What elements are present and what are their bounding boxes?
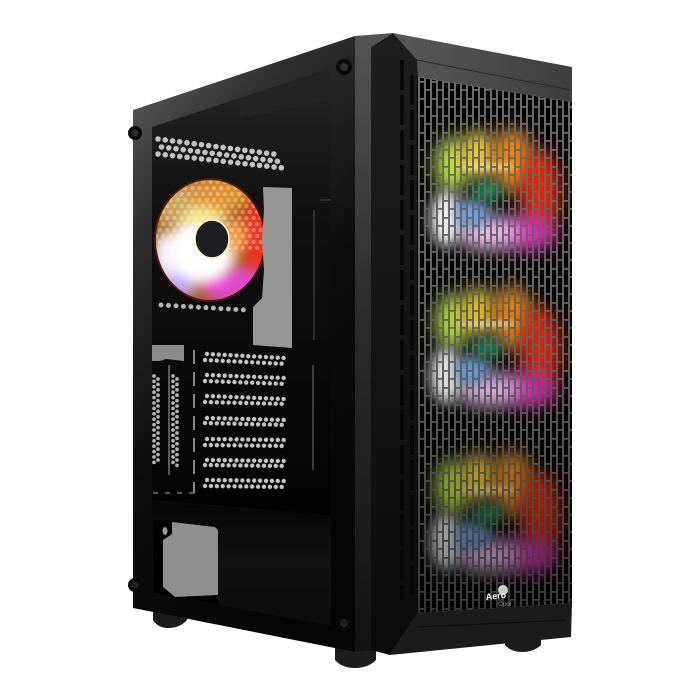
fan: rear side RGB fan (154, 178, 264, 302)
expansion slot perforations (205, 354, 287, 487)
front top band (393, 33, 572, 102)
logo: AeroCool: Aero (485, 590, 507, 602)
front bottom band (390, 603, 572, 655)
bottom band crease (417, 620, 567, 627)
screw: top left (128, 126, 142, 140)
front pillar: side edge (355, 33, 393, 652)
PSU opening (153, 520, 218, 604)
fan: front bottom (430, 452, 560, 574)
panel: inner chamber through glass (152, 68, 331, 515)
front pillar: face (371, 33, 418, 655)
logo: AeroCool (485, 585, 512, 608)
fan: front top (430, 129, 560, 251)
foot: rear left (153, 605, 187, 628)
panel: basement shroud (152, 502, 331, 626)
row of holes under fan (161, 305, 245, 310)
screw: bottom left (128, 578, 142, 592)
gray bracket cut-out (253, 187, 292, 348)
vertical perforated strips (154, 376, 177, 467)
pillar slots (402, 60, 412, 600)
top vent mesh shading (240, 68, 331, 118)
expansion slot divider (168, 365, 170, 475)
fan: front middle (430, 286, 560, 408)
top radiator vent holes (158, 139, 283, 168)
PSU screw hole (162, 527, 168, 535)
fan hub (195, 220, 229, 258)
mesh grille (418, 77, 572, 613)
logo: AeroCool: Cool (498, 601, 512, 608)
grille shading (418, 77, 572, 613)
small gray plate (152, 345, 184, 361)
rear bottom edge ticks (153, 492, 194, 494)
panel: side glass frame (133, 36, 355, 652)
screw: bottom right (336, 615, 352, 631)
slot strip (193, 350, 195, 493)
foot: front right (505, 640, 541, 652)
top band crease (417, 60, 571, 90)
PSU gray plate (163, 522, 218, 597)
illustration: PC tower case (128, 33, 572, 668)
right-side cable routing cut-outs (313, 200, 331, 470)
panel: front mesh (417, 77, 572, 613)
foot: front centre (335, 645, 376, 668)
screw: top right (336, 59, 352, 75)
